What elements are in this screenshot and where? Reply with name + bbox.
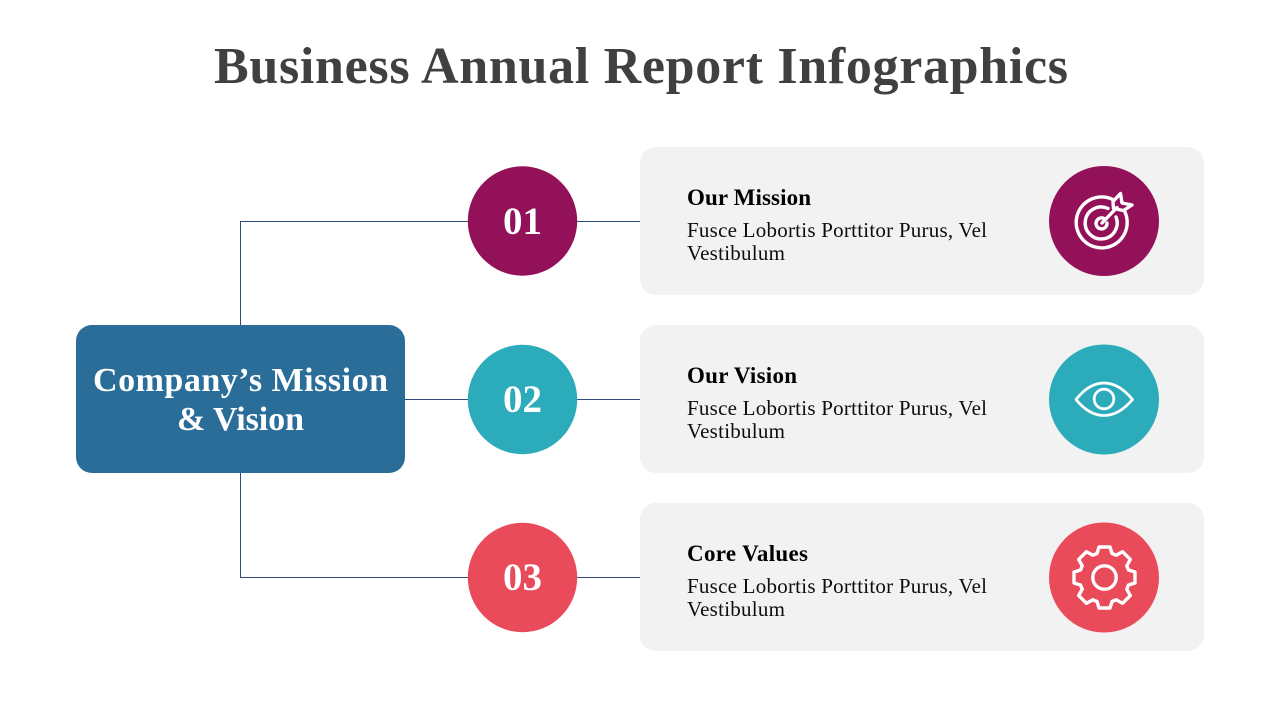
panel: our vision [640, 325, 1204, 473]
text: core values description [687, 574, 987, 621]
text: core values description: Vestibulum [687, 597, 785, 621]
text: our vision description: Vestibulum [687, 419, 785, 443]
text: our mission description: Fusce Lobortis Porttitor Purus, Vel [687, 218, 987, 242]
number badge 01: 01 [503, 200, 542, 243]
text: our mission description [687, 218, 987, 265]
number badge 03 [468, 523, 577, 632]
text: our vision description [687, 396, 987, 443]
icon: eye [1049, 344, 1159, 454]
heading: core values: Core Values [687, 541, 808, 566]
panel: our mission [640, 147, 1204, 295]
number badge 02 [468, 345, 577, 454]
panel: core values [640, 503, 1204, 651]
text: core values description: Fusce Lobortis Porttitor Purus, Vel [687, 574, 987, 598]
number badge 02: 02 [503, 378, 542, 421]
icon: gear [1049, 522, 1159, 632]
heading: our mission: Our Mission [687, 185, 811, 210]
icon: target [1049, 166, 1159, 276]
number badge 01 [468, 166, 577, 276]
central box: Company's Mission & Vision: Company’s Mission [93, 362, 388, 399]
number badge 03: 03 [503, 556, 542, 599]
title: Business Annual Report Infographics [214, 38, 1068, 95]
text: our mission description: Vestibulum [687, 241, 785, 265]
text: our vision description: Fusce Lobortis Porttitor Purus, Vel [687, 396, 987, 420]
connector lines [240, 222, 640, 578]
heading: our vision: Our Vision [687, 363, 797, 388]
central box: Company's Mission & Vision: & Vision [177, 401, 304, 438]
central box: Company's Mission & Vision [76, 325, 405, 473]
